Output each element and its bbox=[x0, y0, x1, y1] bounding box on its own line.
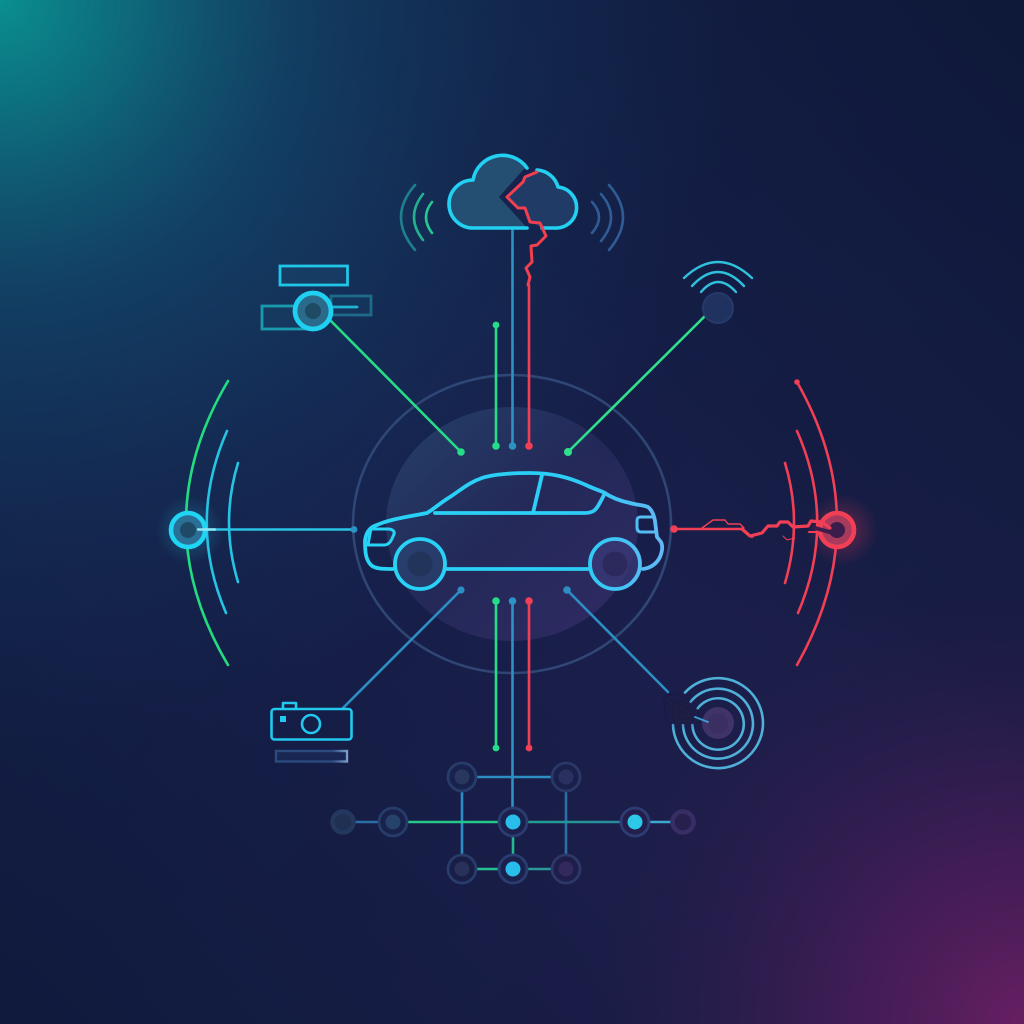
central hub: rings around the car bbox=[353, 375, 671, 673]
connector: wifi to car bbox=[564, 316, 705, 456]
right signal arcs bbox=[785, 382, 837, 665]
car pillar bbox=[533, 475, 542, 513]
connector lines with endpoint dots bbox=[198, 228, 705, 815]
red fault line bbox=[674, 520, 830, 540]
left waves bbox=[401, 185, 432, 250]
crack through the cloud bbox=[507, 172, 546, 285]
left sensor node bbox=[171, 513, 215, 547]
node: left bbox=[379, 808, 407, 836]
network links bbox=[355, 777, 672, 869]
wifi node bbox=[703, 293, 733, 323]
front wheel bbox=[395, 539, 445, 589]
icon: wifi beacon bbox=[684, 262, 752, 323]
connector: bottom blue bbox=[509, 597, 516, 815]
right link dot bbox=[670, 525, 678, 533]
connector: bottom green bbox=[492, 597, 500, 751]
server rack left bbox=[262, 306, 312, 329]
car window line bbox=[435, 493, 605, 513]
fault glow bbox=[806, 494, 878, 566]
node: bottom centre active bbox=[499, 855, 527, 883]
right waves bbox=[592, 185, 623, 250]
crack shadow bbox=[499, 167, 537, 228]
icon: radar target bbox=[668, 678, 763, 768]
node: far right bbox=[672, 812, 694, 832]
radar core bbox=[702, 707, 734, 739]
wifi arcs bbox=[684, 262, 752, 292]
left signal arcs bbox=[186, 381, 238, 665]
icon: broken cloud with waves bbox=[401, 155, 623, 285]
car sill bbox=[447, 567, 588, 571]
node: right active bbox=[621, 808, 649, 836]
connector: top green bbox=[492, 322, 500, 450]
node: centre active bbox=[499, 808, 527, 836]
car outline icon bbox=[365, 473, 662, 589]
camera indicator bbox=[280, 716, 286, 722]
server rack right bbox=[331, 296, 371, 315]
connector: cloud to car blue bbox=[509, 228, 516, 450]
icon: camera bbox=[272, 703, 352, 762]
cloud fills bbox=[449, 155, 577, 228]
connector: camera to car bbox=[343, 586, 465, 708]
arc start dot bbox=[794, 379, 800, 385]
icon: right signal sensor with fault bbox=[670, 379, 878, 665]
camera bump bbox=[283, 703, 296, 708]
car body bbox=[365, 473, 662, 569]
node: bottom right bbox=[552, 855, 580, 883]
tail light bbox=[637, 517, 655, 532]
connector: radar to car bbox=[563, 586, 668, 692]
left sensor glow bbox=[156, 496, 224, 564]
connector: left sensor to car bbox=[198, 526, 357, 533]
camera body bbox=[272, 709, 352, 740]
radar rings bbox=[673, 678, 763, 768]
connector: cloud to car red bbox=[525, 285, 533, 450]
server link bbox=[333, 306, 357, 308]
radar dark wedge bbox=[668, 697, 696, 722]
node gap bbox=[815, 528, 833, 533]
camera lens bbox=[302, 715, 320, 733]
server rack top bbox=[280, 266, 348, 285]
connector: bottom red bbox=[525, 597, 533, 751]
node: bottom left bbox=[448, 855, 476, 883]
icon: left signal sensor bbox=[156, 381, 238, 665]
connector: server to car bbox=[330, 320, 465, 456]
icon: server blocks with node bbox=[262, 266, 371, 329]
server node bbox=[295, 293, 331, 329]
camera label bar bbox=[276, 751, 347, 762]
node: far left bbox=[332, 812, 354, 832]
network diagram bbox=[332, 763, 694, 883]
node: top right bbox=[552, 763, 580, 791]
node: top left bbox=[448, 763, 476, 791]
rear wheel bbox=[590, 539, 640, 589]
cloud outline bbox=[449, 155, 577, 228]
headlight bbox=[368, 529, 394, 545]
right sensor node bbox=[820, 513, 854, 547]
radar needle bbox=[695, 717, 708, 722]
